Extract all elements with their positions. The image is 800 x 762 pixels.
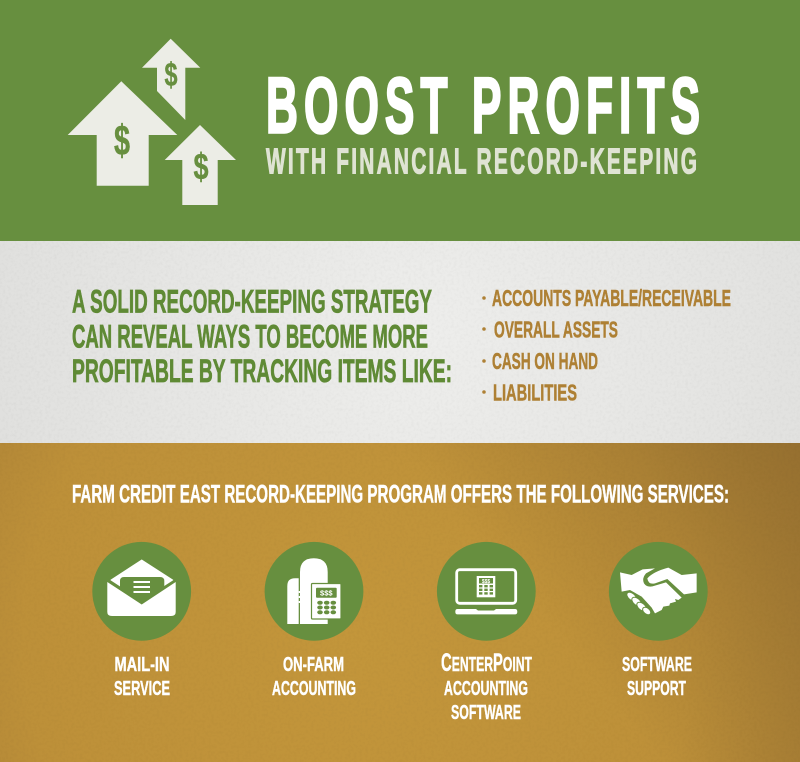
label: MAIL-IN	[114, 653, 170, 676]
list: tracked items	[482, 285, 731, 406]
icon: rising money arrows	[68, 39, 236, 205]
label: SOFTWARE	[451, 701, 521, 724]
text block: strategy statement: PROFITABLE BY TRACKING ITEMS LIKE:	[72, 353, 452, 389]
text block: strategy statement	[72, 284, 452, 389]
label: SUPPORT	[627, 677, 686, 700]
icon: silos and calculator	[265, 542, 363, 641]
service: on-farm	[265, 542, 363, 700]
list: tracked items: OVERALL ASSETS	[494, 316, 618, 342]
label: CENTERPOINT	[441, 649, 532, 677]
icon: laptop: $$$	[482, 579, 490, 585]
icon: rising money arrows: $	[194, 146, 209, 187]
title: BOOST PROFITS	[266, 61, 700, 150]
label: SOFTWARE	[622, 653, 692, 676]
icon: handshake	[609, 542, 708, 641]
label: ACCOUNTING	[444, 677, 528, 700]
service: mail-in	[92, 542, 191, 700]
label	[622, 653, 692, 700]
icon: rising money arrows: $	[164, 56, 178, 93]
label	[441, 649, 532, 724]
panel: green header	[0, 0, 800, 241]
subtitle: WITH FINANCIAL RECORD-KEEPING	[266, 142, 697, 182]
text block: strategy statement: A SOLID RECORD-KEEPING STRATEGY	[72, 284, 432, 320]
service: centerpoint software	[437, 542, 536, 724]
list: tracked items: LIABILITIES	[493, 380, 577, 406]
text block: strategy statement: CAN REVEAL WAYS TO BECOME MORE	[72, 318, 428, 354]
icon: laptop	[437, 542, 536, 641]
list: tracked items: CASH ON HAND	[492, 348, 598, 374]
label: ON-FARM	[283, 653, 344, 676]
label	[114, 653, 170, 700]
icon: envelope	[92, 542, 191, 641]
panel: services	[0, 443, 800, 762]
icon: rising money arrows: $	[114, 117, 130, 165]
icon: silos and calculator: $$$	[320, 589, 333, 598]
label: SERVICE	[114, 677, 170, 700]
label	[272, 653, 356, 700]
panel: record-keeping strategy	[0, 241, 800, 443]
service: software support	[609, 542, 708, 700]
label: ACCOUNTING	[272, 677, 356, 700]
